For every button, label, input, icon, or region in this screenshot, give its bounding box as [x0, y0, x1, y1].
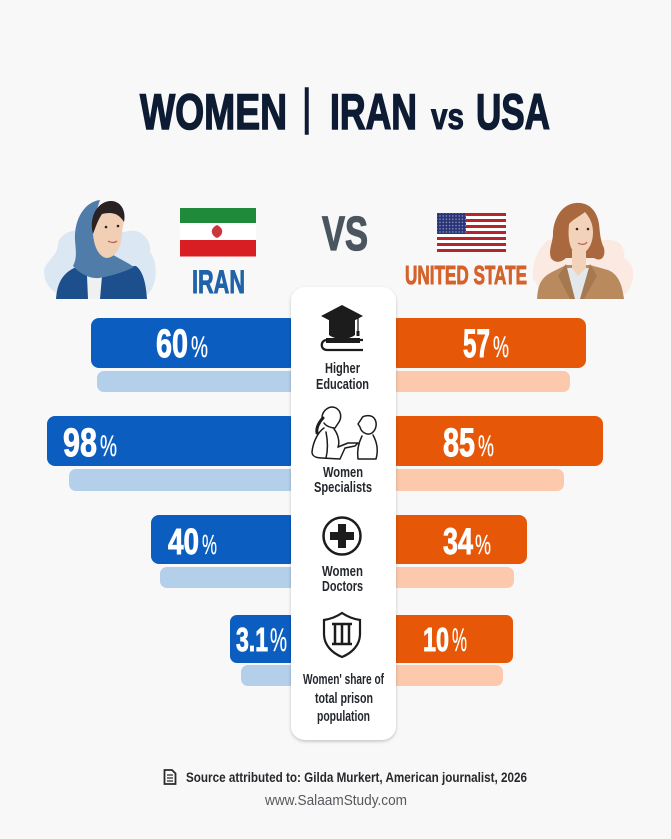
bar row: Higher Education, Iran 60% — [91, 318, 297, 392]
bar row: Higher Education, Iran 60%: % — [191, 331, 208, 364]
icon: doctor and patient — [312, 407, 377, 459]
bar row: Higher Education, USA 57% — [390, 318, 586, 392]
title: USA — [476, 84, 550, 140]
label: Women Doctors — [322, 564, 363, 595]
label: Higher Education: Education — [316, 377, 369, 393]
bar row: Women Specialists, Iran 98%: % — [100, 430, 117, 463]
label: Women's share of total prison population: population — [317, 709, 370, 725]
label: Women's share of total prison population — [303, 672, 384, 725]
bar row: Women Doctors, Iran 40%: % — [202, 529, 217, 560]
flag: Iran — [180, 208, 256, 256]
label: Women Doctors: Doctors — [322, 579, 363, 595]
bar row: Prison population, Iran 3.1% — [230, 615, 297, 686]
portrait: Iranian woman — [44, 200, 156, 299]
bar row: Women Specialists, Iran 98%: 98 — [63, 421, 97, 465]
icon: graduation cap on book — [321, 305, 363, 350]
bar row: Prison population, USA 10%: 10 — [423, 621, 449, 658]
bar row: Higher Education, USA 57%: % — [493, 331, 509, 364]
title: WOMEN — [140, 84, 287, 140]
bar row: Prison population, Iran 3.1%: 3.1 — [236, 621, 268, 658]
website: www.SalaamStudy.com — [264, 792, 407, 809]
bar row: Prison population, USA 10% — [390, 615, 513, 686]
bar row: Women Doctors, Iran 40%: 40 — [168, 521, 199, 562]
bar row: Women Doctors, USA 34% — [390, 515, 527, 588]
bar row: Higher Education, Iran 60%: 60 — [156, 322, 188, 366]
label: Women Specialists — [314, 465, 372, 496]
label: Iran: IRAN — [192, 264, 245, 300]
bar row: Women Doctors, USA 34%: 34 — [443, 521, 473, 562]
bar row: Women Doctors, Iran 40% — [151, 515, 297, 588]
label: Higher Education: Higher — [325, 361, 360, 377]
title — [140, 84, 550, 140]
bar row: Women Specialists, USA 85%: 85 — [443, 421, 475, 465]
title: vs — [431, 96, 464, 137]
label: Higher Education — [316, 361, 369, 393]
bar row: Women Specialists, Iran 98% — [47, 416, 297, 491]
portrait: American woman — [533, 203, 633, 299]
VS label: VS — [322, 208, 368, 261]
flag: United States — [437, 213, 506, 252]
icon: document — [164, 770, 176, 784]
center panel — [291, 287, 396, 740]
label: Women Specialists: Specialists — [314, 480, 372, 496]
label: Women Doctors: Women — [322, 564, 363, 580]
source text: Source attributed to: Gilda Murkert, American journalist, 2026 — [186, 769, 527, 785]
label: Women's share of total prison population: total prison — [315, 691, 373, 707]
icon: prison shield — [324, 613, 360, 657]
bar row: Higher Education, USA 57%: 57 — [463, 322, 490, 366]
title: IRAN — [330, 84, 417, 140]
bar row: Women Specialists, USA 85%: % — [478, 430, 494, 463]
icon: medical cross — [324, 518, 360, 554]
bar row: Women Doctors, USA 34%: % — [475, 529, 491, 560]
bar row: Prison population, Iran 3.1%: % — [270, 622, 287, 658]
label: Women's share of total prison population: Women' share of — [303, 672, 384, 688]
bar row: Women Specialists, USA 85% — [390, 416, 603, 491]
bar row: Prison population, USA 10%: % — [452, 622, 467, 658]
label: United State: UNITED STATE — [405, 260, 527, 290]
label: Women Specialists: Women — [323, 465, 363, 481]
